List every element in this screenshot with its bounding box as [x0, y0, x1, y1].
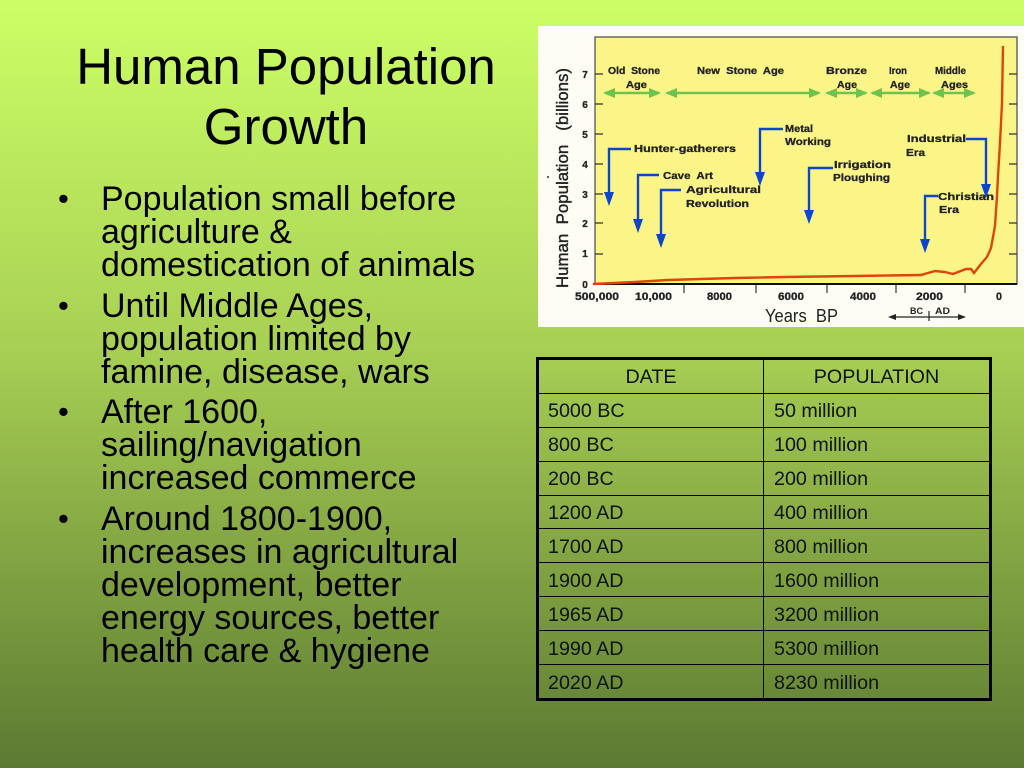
bullet: 1800-1900: development, better — [101, 566, 402, 604]
bullet: 1800-1900: energy sources, better — [101, 599, 439, 637]
event labels: Irrigation — [834, 159, 891, 171]
bullet: after 1600: sailing/navigation — [101, 426, 362, 464]
BC AD marker — [888, 306, 966, 321]
event arrows — [609, 129, 986, 242]
data table: date and population: DATE — [625, 366, 677, 388]
era labels: Old Stone — [608, 65, 660, 77]
data table: date and population: 1200 AD — [548, 502, 624, 524]
data table: date and population — [536, 357, 992, 701]
bullet: population small: Population small before — [101, 180, 456, 218]
data table: date and population: 400 million — [774, 502, 868, 524]
data table: date and population: 5000 BC — [548, 400, 625, 422]
era labels: Iron — [889, 65, 907, 77]
y axis labels: 0 — [582, 280, 588, 291]
bullet: population small: domestication of animals — [101, 246, 475, 284]
era labels: New Stone Age — [697, 65, 784, 77]
data table: date and population: 1700 AD — [548, 536, 624, 558]
plot area — [595, 37, 1017, 284]
bullet: 1800-1900 — [58, 500, 458, 670]
era labels: Age — [837, 79, 857, 91]
event labels: Ploughing — [833, 172, 890, 184]
era labels — [608, 65, 968, 91]
y axis labels: 7 — [582, 70, 588, 81]
y axis labels: 4 — [582, 160, 588, 171]
x axis labels: 6000 — [778, 291, 804, 303]
bullet: middle ages — [58, 287, 430, 391]
x axis labels: 500,000 — [575, 291, 619, 303]
title: Human Population — [76, 38, 496, 95]
x axis title: Years BP — [765, 306, 838, 326]
event labels: Hunter-gatherers — [634, 143, 736, 155]
chart: human population over time — [538, 26, 1024, 327]
era labels: Bronze — [826, 65, 867, 77]
BC AD marker: BC — [910, 306, 923, 317]
data table: date and population: 5300 million — [774, 638, 879, 660]
y axis labels: 3 — [582, 190, 588, 201]
y axis labels: 6 — [582, 100, 588, 111]
bullet: after 1600 — [58, 393, 417, 497]
era labels: Ages — [941, 79, 968, 91]
era labels: Middle — [935, 65, 966, 77]
data table: date and population: 50 million — [774, 400, 857, 422]
data table: date and population: 1990 AD — [548, 638, 624, 660]
bullet: 1800-1900: Around 1800-1900, — [101, 500, 392, 538]
bullet: after 1600: After 1600, — [101, 393, 267, 431]
event labels: Industrial — [907, 133, 966, 145]
event labels: Christian — [938, 191, 994, 203]
x axis labels: 4000 — [850, 291, 876, 303]
title: Growth — [204, 98, 368, 155]
event labels: Revolution — [686, 198, 749, 210]
y axis labels — [582, 70, 588, 291]
event labels: Agricultural — [686, 184, 761, 196]
x axis labels — [575, 291, 1002, 303]
bullet: 1800-1900: • — [58, 501, 69, 536]
event labels: Metal — [785, 123, 813, 135]
era arrows — [603, 88, 976, 98]
y axis labels: 1 — [582, 249, 588, 260]
bullet: after 1600: increased commerce — [101, 459, 417, 497]
x axis labels: 8000 — [707, 291, 732, 303]
title — [76, 38, 496, 155]
event labels: Working — [785, 136, 831, 148]
y axis title: Human Population (billions) — [553, 68, 572, 288]
bullet: 1800-1900: increases in agricultural — [101, 533, 458, 571]
data table: date and population: 800 million — [774, 536, 868, 558]
era labels: Age — [890, 79, 910, 91]
x axis labels: 10,000 — [635, 291, 672, 303]
y axis labels: 2 — [582, 219, 588, 230]
data table: date and population: 8230 million — [774, 672, 879, 694]
bullet: middle ages: • — [58, 288, 69, 323]
bullet: population small: agriculture & — [101, 213, 292, 251]
data table: date and population: 1600 million — [774, 570, 879, 592]
data table: date and population: 3200 million — [774, 604, 879, 626]
bullet: middle ages: population limited by — [101, 320, 411, 358]
data table: date and population: 200 million — [774, 468, 868, 490]
BC AD marker: AD — [935, 306, 950, 317]
event labels: Era — [939, 204, 959, 216]
x axis labels: 2000 — [916, 291, 943, 303]
event labels: Cave Art — [663, 170, 714, 182]
bullet: population small — [58, 180, 475, 284]
data table: date and population: POPULATION — [814, 366, 939, 388]
data table: date and population: 800 BC — [548, 434, 614, 456]
bullet list — [58, 180, 475, 670]
bullet: middle ages: famine, disease, wars — [101, 353, 430, 391]
era labels: Age — [626, 79, 647, 91]
data table: date and population: 2020 AD — [548, 672, 624, 694]
data table: date and population: 200 BC — [548, 468, 614, 490]
bullet: 1800-1900: health care & hygiene — [101, 632, 430, 670]
data table: date and population: 1900 AD — [548, 570, 624, 592]
population curve — [593, 46, 1003, 284]
bullet: after 1600: • — [58, 394, 69, 429]
data table: date and population: 1965 AD — [548, 604, 624, 626]
bullet: population small: • — [58, 181, 69, 216]
event labels — [634, 123, 994, 216]
stray mark — [547, 176, 549, 178]
data table: date and population: 100 million — [774, 434, 868, 456]
event labels: Era — [906, 147, 925, 159]
y axis labels: 5 — [582, 130, 588, 141]
x axis labels: 0 — [996, 291, 1002, 303]
bullet: middle ages: Until Middle Ages, — [101, 287, 373, 325]
